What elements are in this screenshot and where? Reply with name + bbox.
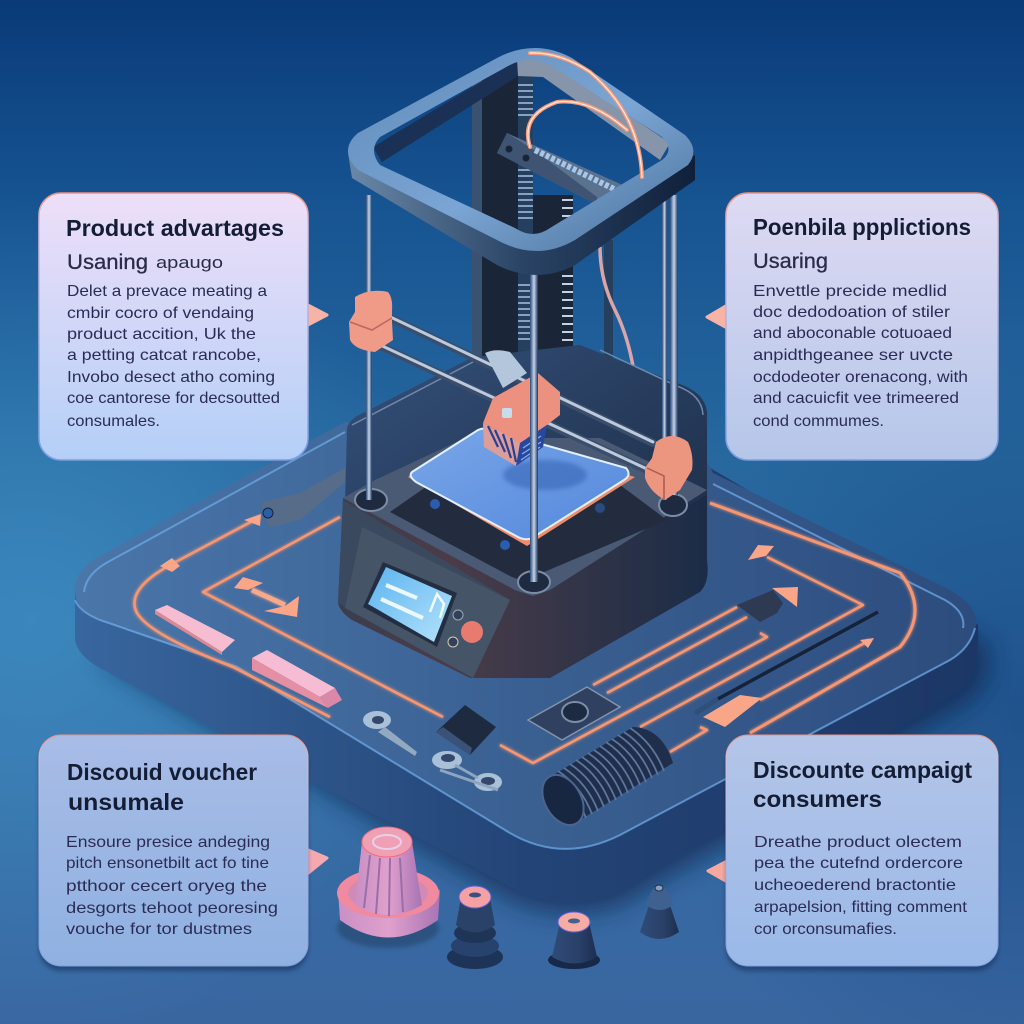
- bracket with belt: [497, 133, 627, 205]
- heading: unsumale: [68, 789, 184, 815]
- body text: Invobo desect atho coming: [67, 369, 275, 386]
- body text: Delet a prevace meating a: [67, 283, 267, 300]
- pointer: [708, 860, 729, 883]
- base body: [338, 495, 708, 678]
- small tools: [363, 705, 502, 791]
- wrench: [262, 468, 345, 527]
- pointer: [306, 849, 327, 875]
- body text: and cacuicfit vee trimeered: [753, 390, 959, 407]
- body text: arpapelsion, fitting comment: [754, 899, 968, 916]
- heading: consumers: [753, 786, 882, 812]
- body text: coe cantorese for decsoutted: [67, 390, 280, 407]
- body text: ucheoederend bractontie: [754, 877, 956, 894]
- horizontal rods: [378, 312, 653, 470]
- wires: [528, 53, 642, 177]
- tray platform: [75, 422, 990, 913]
- vertical rods: [366, 195, 678, 582]
- body text: Envettle precide medlid: [753, 283, 947, 300]
- heading: [753, 757, 972, 812]
- subheading: Usaring: [753, 250, 828, 273]
- heading: Discounte campaigt: [753, 757, 972, 783]
- heading: Product advartages: [66, 215, 284, 241]
- pointer: [306, 304, 327, 326]
- body text: vouche for tor dustmes: [66, 921, 252, 938]
- body text: cmbir cocro of vendaing: [67, 305, 254, 322]
- filament coil: [534, 727, 673, 832]
- panel: discount campaign: [708, 735, 998, 971]
- base walls: [345, 345, 707, 600]
- nozzle: stepped cone: [447, 886, 503, 969]
- printer: [338, 48, 708, 678]
- body text: cor orconsumafies.: [754, 921, 897, 938]
- base deck: [343, 438, 707, 596]
- body text: Ensoure presice andeging: [66, 834, 270, 851]
- body text: a petting catcat rancobe,: [67, 347, 261, 364]
- back wire: [600, 247, 638, 440]
- subheading: Usaning: [67, 251, 148, 274]
- body text: cond commumes.: [753, 413, 884, 430]
- circuit lines and arrows: [134, 503, 915, 763]
- panel: possible applications: [707, 193, 998, 460]
- body text: consumales.: [67, 413, 160, 430]
- pointer: [707, 304, 729, 329]
- print head: [483, 350, 560, 466]
- body text: and aboconable cotuoaed: [753, 325, 952, 342]
- pink bars: [155, 605, 342, 708]
- body text: pea the cutefnd ordercore: [754, 855, 963, 872]
- body text: product accition, Uk the: [67, 326, 256, 343]
- top frame: [348, 48, 695, 275]
- body text: ocdodeoter orenacong, with: [753, 369, 968, 386]
- body text: [66, 834, 278, 938]
- panel: product advantages: [39, 193, 327, 460]
- lcd screen: [363, 562, 457, 647]
- subheading: apaugo: [156, 253, 223, 272]
- panel: discount voucher: [39, 735, 327, 971]
- corner mounts: [355, 489, 687, 593]
- heading: Poenbila ppplictions: [753, 214, 971, 240]
- heading: Discouid voucher: [67, 759, 257, 785]
- body text: ptthoor cecert oryeg the: [66, 878, 267, 895]
- body text: doc dedodoation of stiler: [753, 304, 951, 321]
- nozzle: short cone: [548, 912, 600, 969]
- left clamp: [349, 291, 393, 352]
- subheading: [67, 251, 223, 274]
- nozzle: tip cone: [640, 885, 679, 939]
- body text: desgorts tehoot peoresing: [66, 900, 278, 917]
- right clamp: [645, 436, 692, 500]
- arrowheads: [160, 514, 874, 727]
- plate with ring: [528, 687, 620, 740]
- nozzle: pink cone: [337, 827, 440, 948]
- heading: [67, 759, 257, 815]
- body text: [754, 834, 968, 938]
- back column: [472, 70, 613, 380]
- dark bracket and rod: [697, 590, 878, 712]
- body text: anpidthgeanee ser uvcte: [753, 347, 953, 364]
- print bed: [408, 428, 635, 550]
- body text: Dreathe product olectem: [754, 834, 962, 851]
- body text: pitch ensonetbilt act fo tine: [66, 855, 269, 872]
- control panel: [345, 527, 510, 678]
- body text: [67, 283, 280, 430]
- buttons: [448, 610, 483, 647]
- body text: [753, 283, 968, 430]
